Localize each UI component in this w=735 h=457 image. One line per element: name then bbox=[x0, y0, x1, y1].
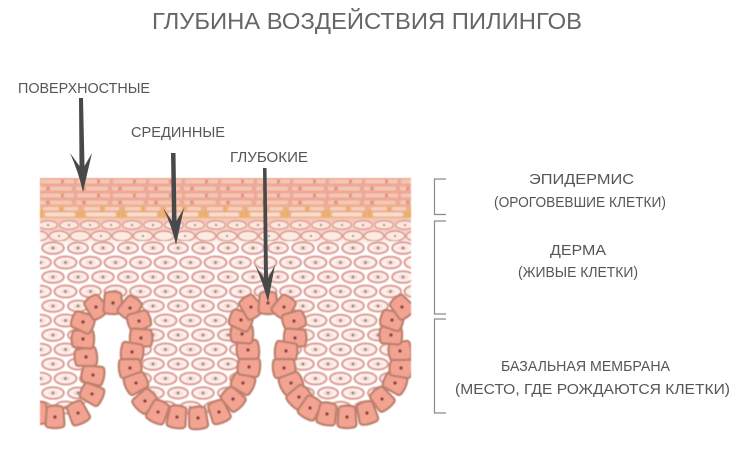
label: epidermis: ЭПИДЕРМИС bbox=[529, 171, 634, 188]
label: horny cells: (ОРОГОВЕВШИЕ КЛЕТКИ) bbox=[494, 194, 666, 211]
bracket: basal membrane bbox=[434, 319, 446, 413]
horny cell band bbox=[40, 205, 411, 219]
label: medium: СРЕДИННЫЕ bbox=[131, 124, 225, 141]
label: basal membrane: БАЗАЛЬНАЯ МЕМБРАНА bbox=[501, 358, 670, 375]
label: living cells: (ЖИВЫЕ КЛЕТКИ) bbox=[518, 264, 638, 281]
label: superficial: ПОВЕРХНОСТНЫЕ bbox=[18, 80, 150, 97]
arrow: medium peel bbox=[163, 153, 184, 245]
label: deep: ГЛУБОКИЕ bbox=[230, 149, 308, 166]
arrow: deep peel bbox=[255, 168, 275, 302]
arrow: superficial peel bbox=[70, 98, 92, 192]
dermis cells bbox=[40, 218, 411, 431]
label: where cells are born: (МЕСТО, ГДЕ РОЖДАЮТСЯ КЛЕТКИ) bbox=[455, 381, 730, 398]
bracket: dermis bbox=[434, 221, 446, 314]
bracket: epidermis bbox=[434, 179, 446, 214]
title: ГЛУБИНА ВОЗДЕЙСТВИЯ ПИЛИНГОВ bbox=[152, 7, 582, 34]
label: dermis: ДЕРМА bbox=[550, 242, 606, 259]
skin cross-section illustration bbox=[28, 178, 416, 431]
epidermis layer bbox=[40, 178, 411, 206]
basal membrane cells bbox=[28, 292, 416, 430]
